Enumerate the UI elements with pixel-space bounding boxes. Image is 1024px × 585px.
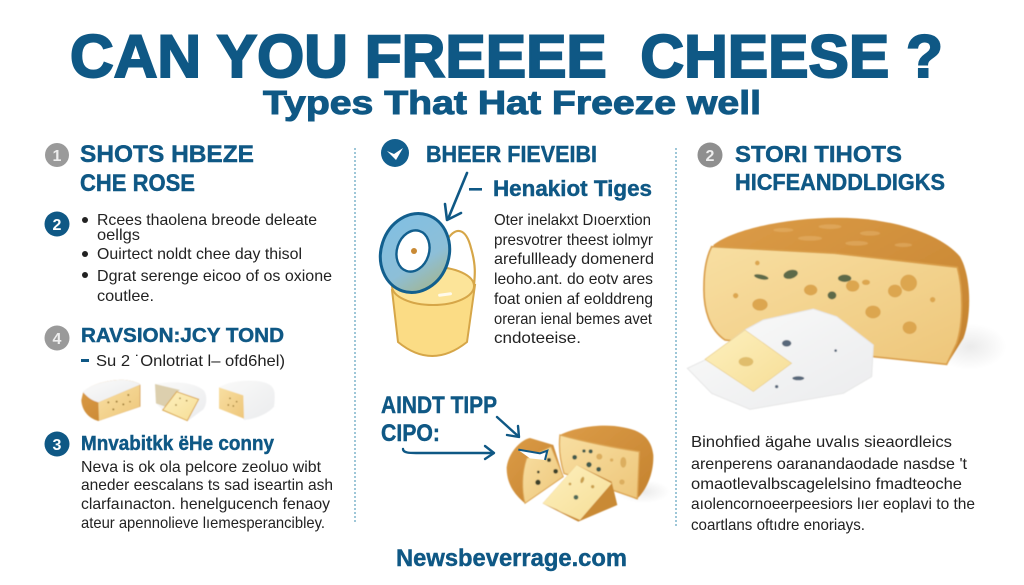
bullet list [82, 212, 332, 305]
icon: bucket and ring [370, 204, 475, 356]
icon: number 2: 2 [53, 217, 62, 234]
body text: arenperens oaranandaodade nasdse 't [691, 456, 968, 473]
heading: hendkiot tiges: Henakiot Tiges [493, 176, 652, 201]
icon: number 3: 3 [53, 437, 62, 454]
body text: clarfaınacton. henelgucench fenaoy [81, 496, 330, 513]
heading: aindt tipp cipo: AINDT TIPP [381, 392, 497, 419]
subtitle: Types That Hat Freeze well [263, 84, 761, 121]
body text: foat onien af eolddreng [494, 291, 653, 308]
arrow: to wedge side [403, 446, 494, 459]
icon: number 2 grey [698, 142, 722, 168]
panel: middle column [370, 139, 670, 572]
heading: shots hbeze cheese: SHOTS HBEZE [80, 141, 254, 168]
body text: Oter inelakxt Dıoerxtion [494, 212, 651, 229]
body text: cndoteeise. [494, 330, 581, 347]
icon: number 4: 4 [53, 331, 62, 348]
body text: Neva is ok ola pelcore zeoluo wibt [81, 459, 322, 476]
bullet list: oellgs [97, 227, 140, 244]
body text: Binohfied ägahe uvalıs sieaordleics [691, 434, 952, 451]
body text: arefullleady domenerd [494, 251, 654, 268]
arrow: to bucket icon [445, 173, 467, 220]
icon: number 3 [44, 432, 70, 456]
body text: oreran ienal bemes avet [494, 311, 653, 328]
sub line: Su 2 ˙Onlotriat l– ofd6hel) [96, 353, 285, 370]
icon: number 2 grey: 2 [706, 148, 715, 165]
body text: omaotlevalbscagelelsino fmadteoche [691, 476, 962, 493]
icon: number 4 [44, 326, 70, 350]
bullet list: Dgrat serenge eicoo of os oxione [97, 268, 332, 285]
icon: three small cheeses [81, 380, 275, 421]
arrow: to wedge top [497, 417, 519, 437]
bullet list: Rcees thaolena breode deleate [97, 212, 317, 229]
heading: stori tihots [735, 141, 945, 195]
heading: shots hbeze cheese [80, 141, 254, 197]
icon: number 2 [44, 212, 70, 236]
panel: left column [44, 141, 333, 532]
heading: aindt tipp cipo [381, 392, 497, 447]
heading: bheer fieveibi: BHEER FIEVEIBI [426, 141, 597, 167]
heading: aindt tipp cipo: CIPO: [381, 420, 440, 447]
heading: stori tihots: STORI TIHOTS [735, 141, 902, 167]
body text [691, 434, 975, 534]
body text: ateur apennolieve lıemesperancibley. [81, 515, 325, 532]
image: large cheese wheel with brie wedge [687, 218, 1007, 409]
body text: coartlans oftıdre enoriays. [691, 517, 865, 534]
bullet list: coutlee. [97, 288, 154, 305]
icon: number 1: 1 [53, 148, 62, 165]
icon: check badge [381, 139, 409, 167]
body text [81, 459, 333, 532]
icon: cheese group [507, 426, 670, 522]
title: CAN YOU FREEEE CHEESE ? [70, 23, 943, 90]
body text: presvotrer theest iolmyr [494, 232, 654, 249]
bullet list: Ouirtect noldt chee day thisol [97, 246, 302, 263]
heading: stori tihots: HICFEANDDLDIGKS [735, 169, 945, 195]
heading: ravsionjcy tond: RAVSION:JCY TOND [81, 325, 284, 347]
icon: number 1 [45, 143, 69, 167]
body text: aneder eescalans ts sad iseartin ash [81, 477, 333, 494]
body text: leoho.ant. do eotv ares [494, 271, 653, 288]
footer url: Newsbeverrage.com [396, 545, 627, 572]
body text [494, 212, 654, 347]
heading: shots hbeze cheese: CHE ROSE [80, 170, 195, 197]
body text: aıolencornoeerpeesiors lıer eoplavi to the [691, 496, 975, 513]
panel: right column [687, 141, 1007, 534]
heading: mnvabitkk: Mnvabitkk ëHe conny [81, 433, 275, 455]
